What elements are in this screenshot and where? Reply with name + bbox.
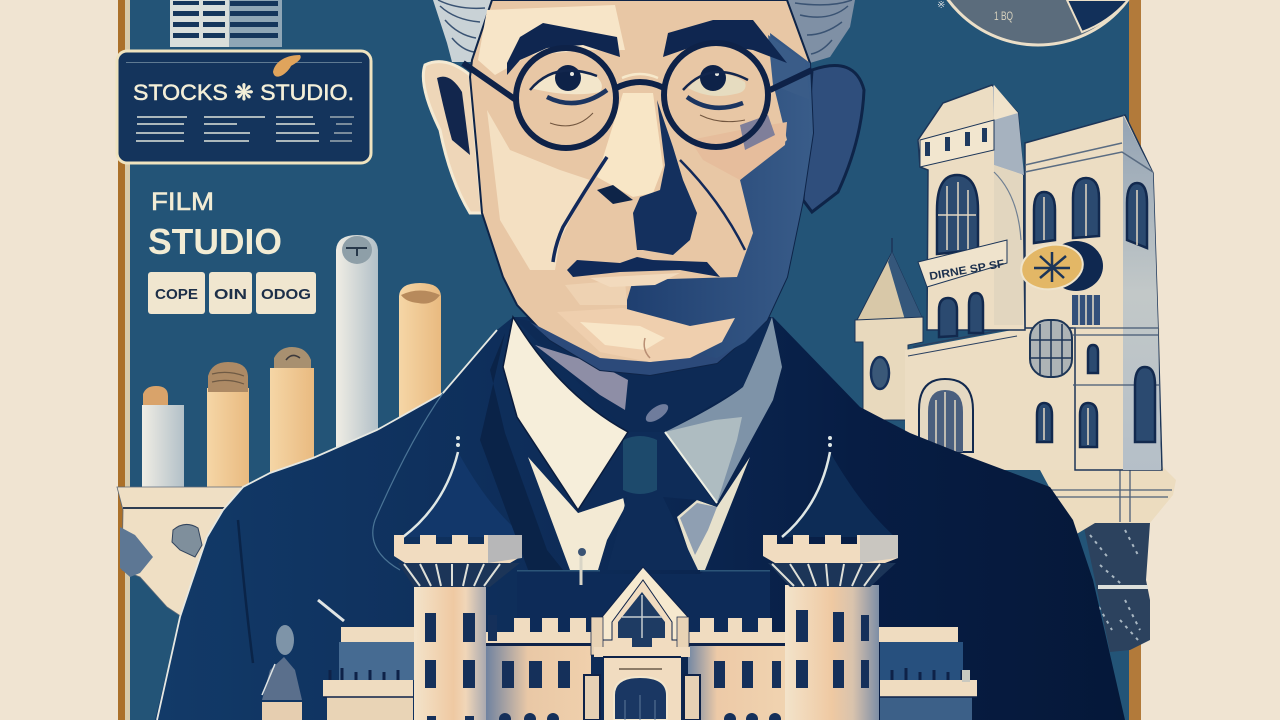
small spire tower xyxy=(857,252,923,320)
chin light xyxy=(557,308,735,362)
tower inscription: DIRNE SP SF xyxy=(928,258,1006,283)
chin shadow band xyxy=(530,320,767,375)
gate section xyxy=(584,567,700,720)
illustration: church building at right xyxy=(855,85,1176,652)
right collar xyxy=(665,317,782,503)
heading: film studio: STUDIO xyxy=(148,221,282,262)
carved lattice base xyxy=(1083,523,1150,652)
left ear xyxy=(423,62,482,213)
icon: carved pedestal at left xyxy=(117,487,245,617)
illustration: castle at bottom xyxy=(262,535,977,720)
suit jacket xyxy=(155,317,1125,720)
illustration: pie dial at top right xyxy=(926,0,1150,45)
bar 3 xyxy=(270,347,314,478)
legend tags: COPE xyxy=(155,286,198,303)
panel: blue poster field with gold frame xyxy=(118,0,1141,720)
bar 4 xyxy=(336,235,378,450)
face xyxy=(470,0,813,375)
sleeve fold xyxy=(238,520,253,663)
legend tags xyxy=(148,272,316,314)
right tower xyxy=(1025,115,1162,470)
far right wing xyxy=(879,627,977,720)
icon: striped building at top left xyxy=(170,0,282,47)
cornice ledge xyxy=(1000,450,1176,535)
dial label: 1 BQ xyxy=(994,9,1013,23)
castle windows xyxy=(425,610,869,720)
nose highlight xyxy=(597,93,663,197)
inner dark lapel strips xyxy=(480,333,567,575)
left tower xyxy=(918,85,1025,330)
nose shadow xyxy=(633,100,697,255)
coin emblem xyxy=(1018,240,1103,294)
smile lines xyxy=(553,157,607,262)
lapel outline xyxy=(373,393,443,570)
lower shirt left xyxy=(528,457,625,570)
bar 2 xyxy=(207,362,249,487)
bar chart xyxy=(142,235,441,487)
sign band xyxy=(918,240,1007,287)
left tower xyxy=(394,535,522,720)
bar 1 xyxy=(142,386,184,487)
lower shirt right xyxy=(677,457,750,570)
legend tags: OIN xyxy=(214,286,247,303)
tower windows xyxy=(937,175,1155,447)
eyebrows xyxy=(507,23,620,75)
lattice balcony xyxy=(1030,320,1072,377)
left small turret xyxy=(262,625,302,720)
main body xyxy=(905,328,1160,470)
face shadow right xyxy=(627,33,813,358)
left central wall xyxy=(486,618,591,720)
suit front band xyxy=(517,570,770,640)
glasses bridge highlight xyxy=(622,74,658,78)
face highlights xyxy=(478,5,625,75)
legend tags: ODOG xyxy=(261,286,311,303)
far left wing xyxy=(318,600,414,720)
sign text lines xyxy=(136,117,354,141)
cheek peach xyxy=(690,122,787,180)
right ear xyxy=(803,66,864,212)
dial mark: ※ xyxy=(937,0,945,11)
right tower xyxy=(763,535,898,720)
sign title: STOCKS ❋ STUDIO. xyxy=(133,80,354,105)
tie xyxy=(578,432,717,570)
hair xyxy=(433,0,492,62)
tie pin xyxy=(580,548,582,585)
bar 5 xyxy=(399,283,441,430)
panel: stocks and studio sign xyxy=(117,51,371,163)
heading: film studio xyxy=(148,188,282,262)
nostril xyxy=(597,185,633,204)
mouth xyxy=(567,257,720,277)
right central wall xyxy=(688,618,785,720)
neck shadow xyxy=(513,317,773,432)
figure: man in a suit xyxy=(155,0,1125,720)
icon: orange blob on sign xyxy=(273,55,301,77)
left lapel cone xyxy=(403,452,525,537)
right lapel cone xyxy=(782,452,895,537)
icon: round glasses xyxy=(463,43,812,148)
heading: film studio: FILM xyxy=(151,188,214,216)
suit edge highlight xyxy=(157,330,497,720)
eyes xyxy=(530,65,748,126)
left collar xyxy=(503,317,628,510)
